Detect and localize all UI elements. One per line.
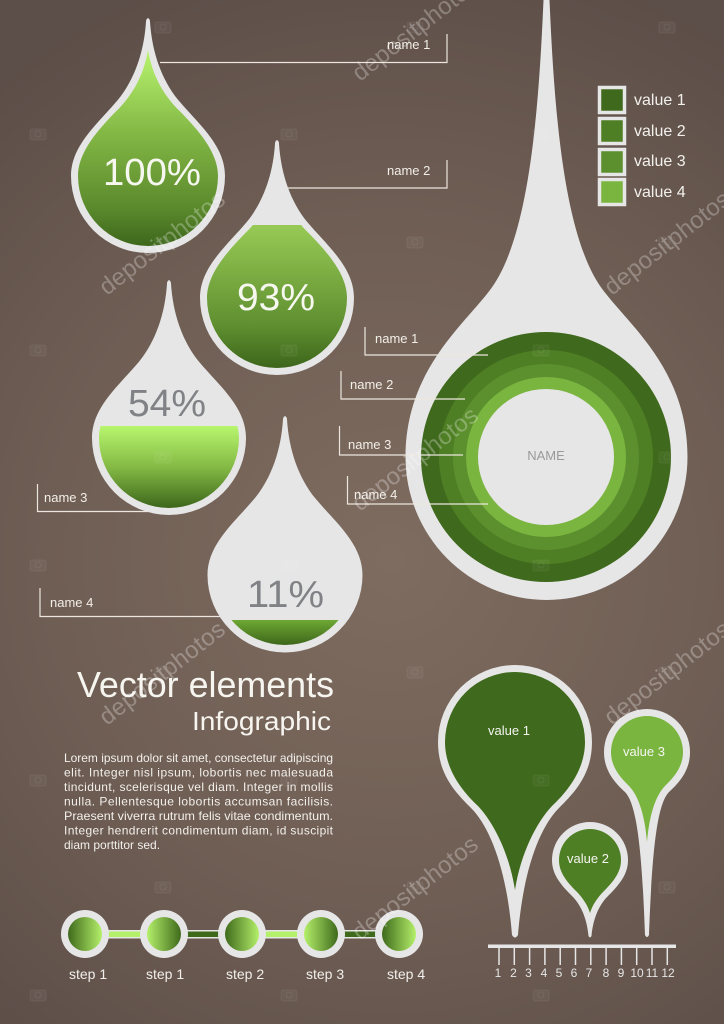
axis scale 1 to 12: 1: [495, 966, 502, 980]
pin: value 1: value 1: [488, 723, 530, 738]
callout: name 2 for drop 2: [278, 160, 447, 188]
callout: name 4 for drop 4: name 4: [50, 595, 93, 610]
drop: 11%: [207, 416, 362, 652]
callout: name 1 for drop 1: [160, 34, 447, 62]
drop: 93%: [200, 140, 355, 375]
callout: name 1 for drop 1: name 1: [387, 37, 430, 52]
step timeline: step 1: [146, 966, 184, 982]
axis scale 1 to 12: [488, 944, 676, 980]
step timeline: step 1: [69, 966, 107, 982]
callout: name 2 for drop 2: name 2: [387, 163, 430, 178]
legend: value 2: [634, 123, 686, 140]
ring callout: name 2: [341, 371, 465, 399]
step timeline: [61, 910, 425, 982]
axis scale 1 to 12: 5: [556, 966, 563, 980]
step timeline: step 2: [226, 966, 264, 982]
body text: Lorem ipsum dolor sit amet, consectetur adipiscing: [64, 751, 333, 765]
ring callout: name 3: [340, 426, 463, 455]
watermark: depositphotos: depositphotos: [94, 616, 230, 731]
pin: value 3: value 3: [623, 744, 665, 759]
subtitle: Infographic: [192, 706, 331, 736]
step timeline: step 3: [306, 966, 344, 982]
axis scale 1 to 12: 4: [541, 966, 548, 980]
legend: [600, 88, 686, 204]
drop: 93%: 93%: [237, 277, 315, 319]
axis scale 1 to 12: 11: [646, 966, 659, 980]
axis scale 1 to 12: 3: [525, 966, 532, 980]
axis scale 1 to 12: 10: [630, 966, 644, 980]
pin: value 3: [604, 709, 690, 937]
ring callout: name 4: name 4: [354, 487, 397, 502]
ring callout: name 3: name 3: [348, 437, 391, 452]
axis scale 1 to 12: 12: [661, 966, 675, 980]
drop: 54%: 54%: [128, 383, 206, 425]
title: Vector elements: [77, 664, 334, 705]
drop: 11%: 11%: [247, 574, 324, 616]
step timeline: step 4: [387, 966, 425, 982]
body text: diam porttitor sed.: [64, 838, 160, 852]
ring callout: name 4: [348, 476, 488, 504]
body text: Praesent viverra rutrum felis vitae condimentum.: [64, 809, 333, 823]
axis scale 1 to 12: 2: [510, 966, 517, 980]
ring callout: name 1: [365, 327, 488, 355]
large drop with concentric rings: NAME: [527, 448, 565, 463]
body text: tincidunt, scelerisque vel diam. Integer in mollis: [64, 780, 333, 794]
watermark: depositphotos: depositphotos: [347, 831, 483, 946]
body text: Integer hendrerit condimentum diam, id suscipit: [64, 824, 334, 838]
body text: elit. Integer nisl ipsum, lobortis nec malesuada: [64, 766, 333, 780]
legend: value 3: [634, 153, 686, 170]
body text: [64, 751, 334, 852]
body text: nulla. Pellentesque lobortis accumsan facilisis.: [64, 794, 333, 808]
callout: name 3 for drop 3: [38, 484, 150, 512]
large drop with concentric rings: [406, 0, 688, 600]
callout: name 4 for drop 4: [40, 588, 230, 616]
drop: 100%: 100%: [103, 152, 201, 194]
axis scale 1 to 12: 7: [586, 966, 593, 980]
pin: value 2: value 2: [567, 851, 609, 866]
axis scale 1 to 12: 9: [618, 966, 625, 980]
legend: value 4: [634, 184, 686, 201]
watermark: depositphotos: depositphotos: [347, 402, 483, 517]
ring callout: name 2: name 2: [350, 377, 393, 392]
ring callout: name 1: name 1: [375, 331, 418, 346]
pin: value 1: [438, 665, 592, 938]
drop: 54%: [92, 280, 247, 516]
axis scale 1 to 12: 6: [571, 966, 578, 980]
drop: 100%: [70, 18, 230, 255]
pin: value 2: [552, 822, 628, 938]
watermark: depositphotos: depositphotos: [94, 186, 230, 301]
axis scale 1 to 12: 8: [603, 966, 610, 980]
legend: value 1: [634, 92, 686, 109]
callout: name 3 for drop 3: name 3: [44, 490, 87, 505]
